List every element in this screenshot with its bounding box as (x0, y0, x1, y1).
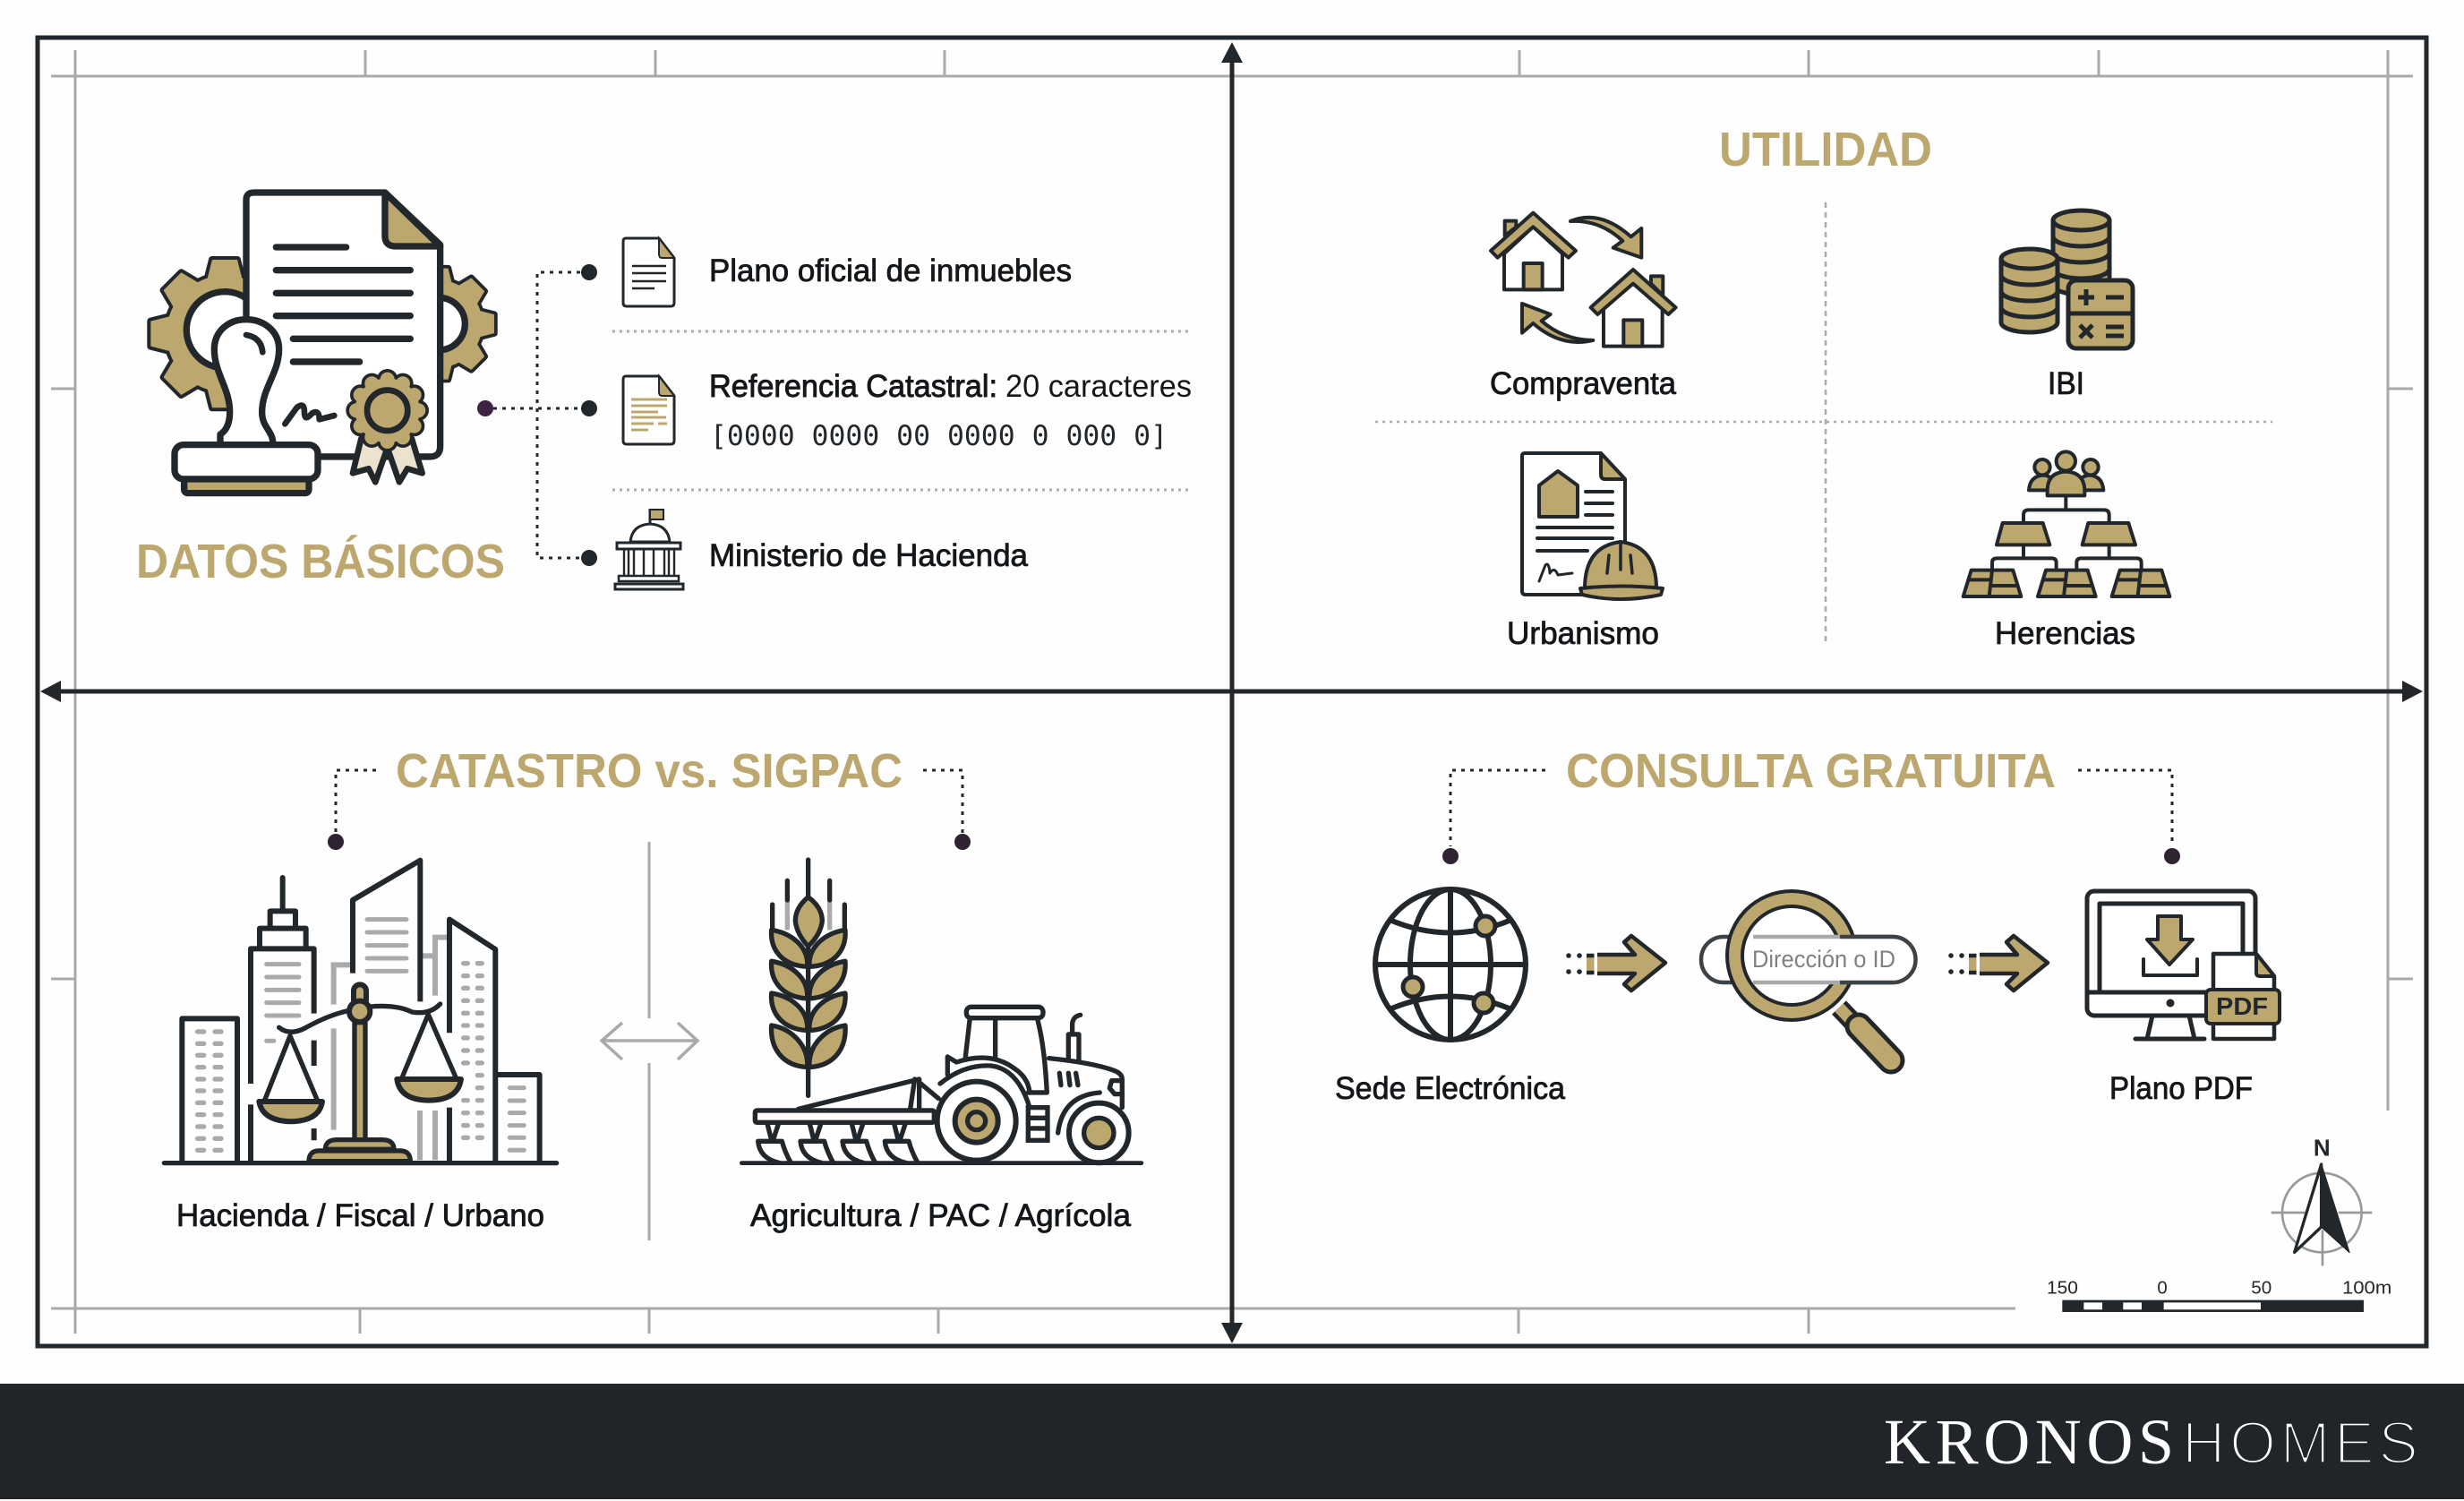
panel: datos basicos (136, 193, 1192, 589)
north arrow (2272, 1135, 2372, 1265)
text: referencia catastral: Referencia Catastral: (709, 369, 997, 404)
scale bar: 150 (2047, 1277, 2078, 1298)
footer band (0, 1384, 2464, 1499)
scale bar: 100m (2342, 1277, 2391, 1298)
arrow: sede to buscador (1566, 936, 1665, 991)
label: herencias: Herencias (1995, 616, 2135, 651)
label: sede electronica: Sede Electrónica (1335, 1071, 1566, 1106)
divider line (612, 331, 1190, 490)
connector tree (477, 264, 597, 566)
heading: catastro vs sigpac: CATASTRO vs. SIGPAC (396, 744, 903, 798)
icon: herencias tree (1964, 451, 2169, 596)
quadrant dividers (1375, 202, 2272, 646)
text: ministerio: Ministerio de Hacienda (709, 538, 1029, 573)
logo: kronos homes: HOMES (2182, 1410, 2418, 1477)
icon: globe (1375, 889, 1526, 1040)
text: plano oficial: Plano oficial de inmuebles (709, 253, 1072, 288)
heading: utilidad: UTILIDAD (1719, 123, 1932, 176)
label: ibi: IBI (2048, 366, 2084, 401)
icon: ministry building (615, 509, 683, 589)
scale bar (2047, 1277, 2391, 1312)
icon: wheat and tractor (741, 860, 1142, 1163)
central divider (648, 842, 650, 1240)
icon: document (623, 238, 674, 306)
panel: consulta gratuita (1335, 744, 2280, 1106)
label: agricultura: Agricultura / PAC / Agrícola (750, 1198, 1132, 1233)
label: compraventa: Compraventa (1490, 366, 1677, 401)
text: referencia catastral (709, 369, 1192, 404)
bracket connectors (1442, 770, 2180, 864)
text: search placeholder: Dirección o ID (1752, 946, 1895, 973)
scale bar: 50 (2251, 1277, 2272, 1298)
heading: consulta gratuita: CONSULTA GRATUITA (1566, 744, 2056, 798)
logo: kronos homes: KRONOS (1884, 1406, 2174, 1478)
panel: catastro vs sigpac (164, 744, 1142, 1240)
panel: utilidad (1375, 123, 2272, 651)
heading: datos basicos: DATOS BÁSICOS (136, 535, 505, 588)
icon: urbanismo document and helmet (1522, 453, 1663, 599)
icon: compraventa houses (1491, 213, 1676, 347)
scale bar: 0 (2157, 1277, 2168, 1298)
bracket connectors (328, 770, 971, 850)
label: hacienda: Hacienda / Fiscal / Urbano (176, 1198, 544, 1233)
arrow: buscador to pdf (1948, 936, 2048, 991)
text: referencia catastral: 20 caracteres (1005, 369, 1192, 404)
text: pdf tag: PDF (2216, 992, 2268, 1020)
logo: kronos homes (1884, 1406, 2418, 1478)
icon: monitor with pdf (2087, 891, 2280, 1039)
north arrow: N (2314, 1135, 2331, 1162)
text: formato referencia: [0000 0000 00 0000 0 000 0] (710, 420, 1168, 452)
icon: gold document (623, 376, 674, 444)
icon: magnifier with search bar (1701, 889, 1916, 1060)
double arrow (602, 1023, 697, 1059)
icon: ibi coins and calculator (2001, 210, 2133, 348)
icon: document with gears, stamp and seal (150, 193, 494, 493)
icon: city and balance (164, 861, 557, 1163)
label: urbanismo: Urbanismo (1507, 616, 1659, 651)
label: plano pdf: Plano PDF (2109, 1071, 2253, 1106)
